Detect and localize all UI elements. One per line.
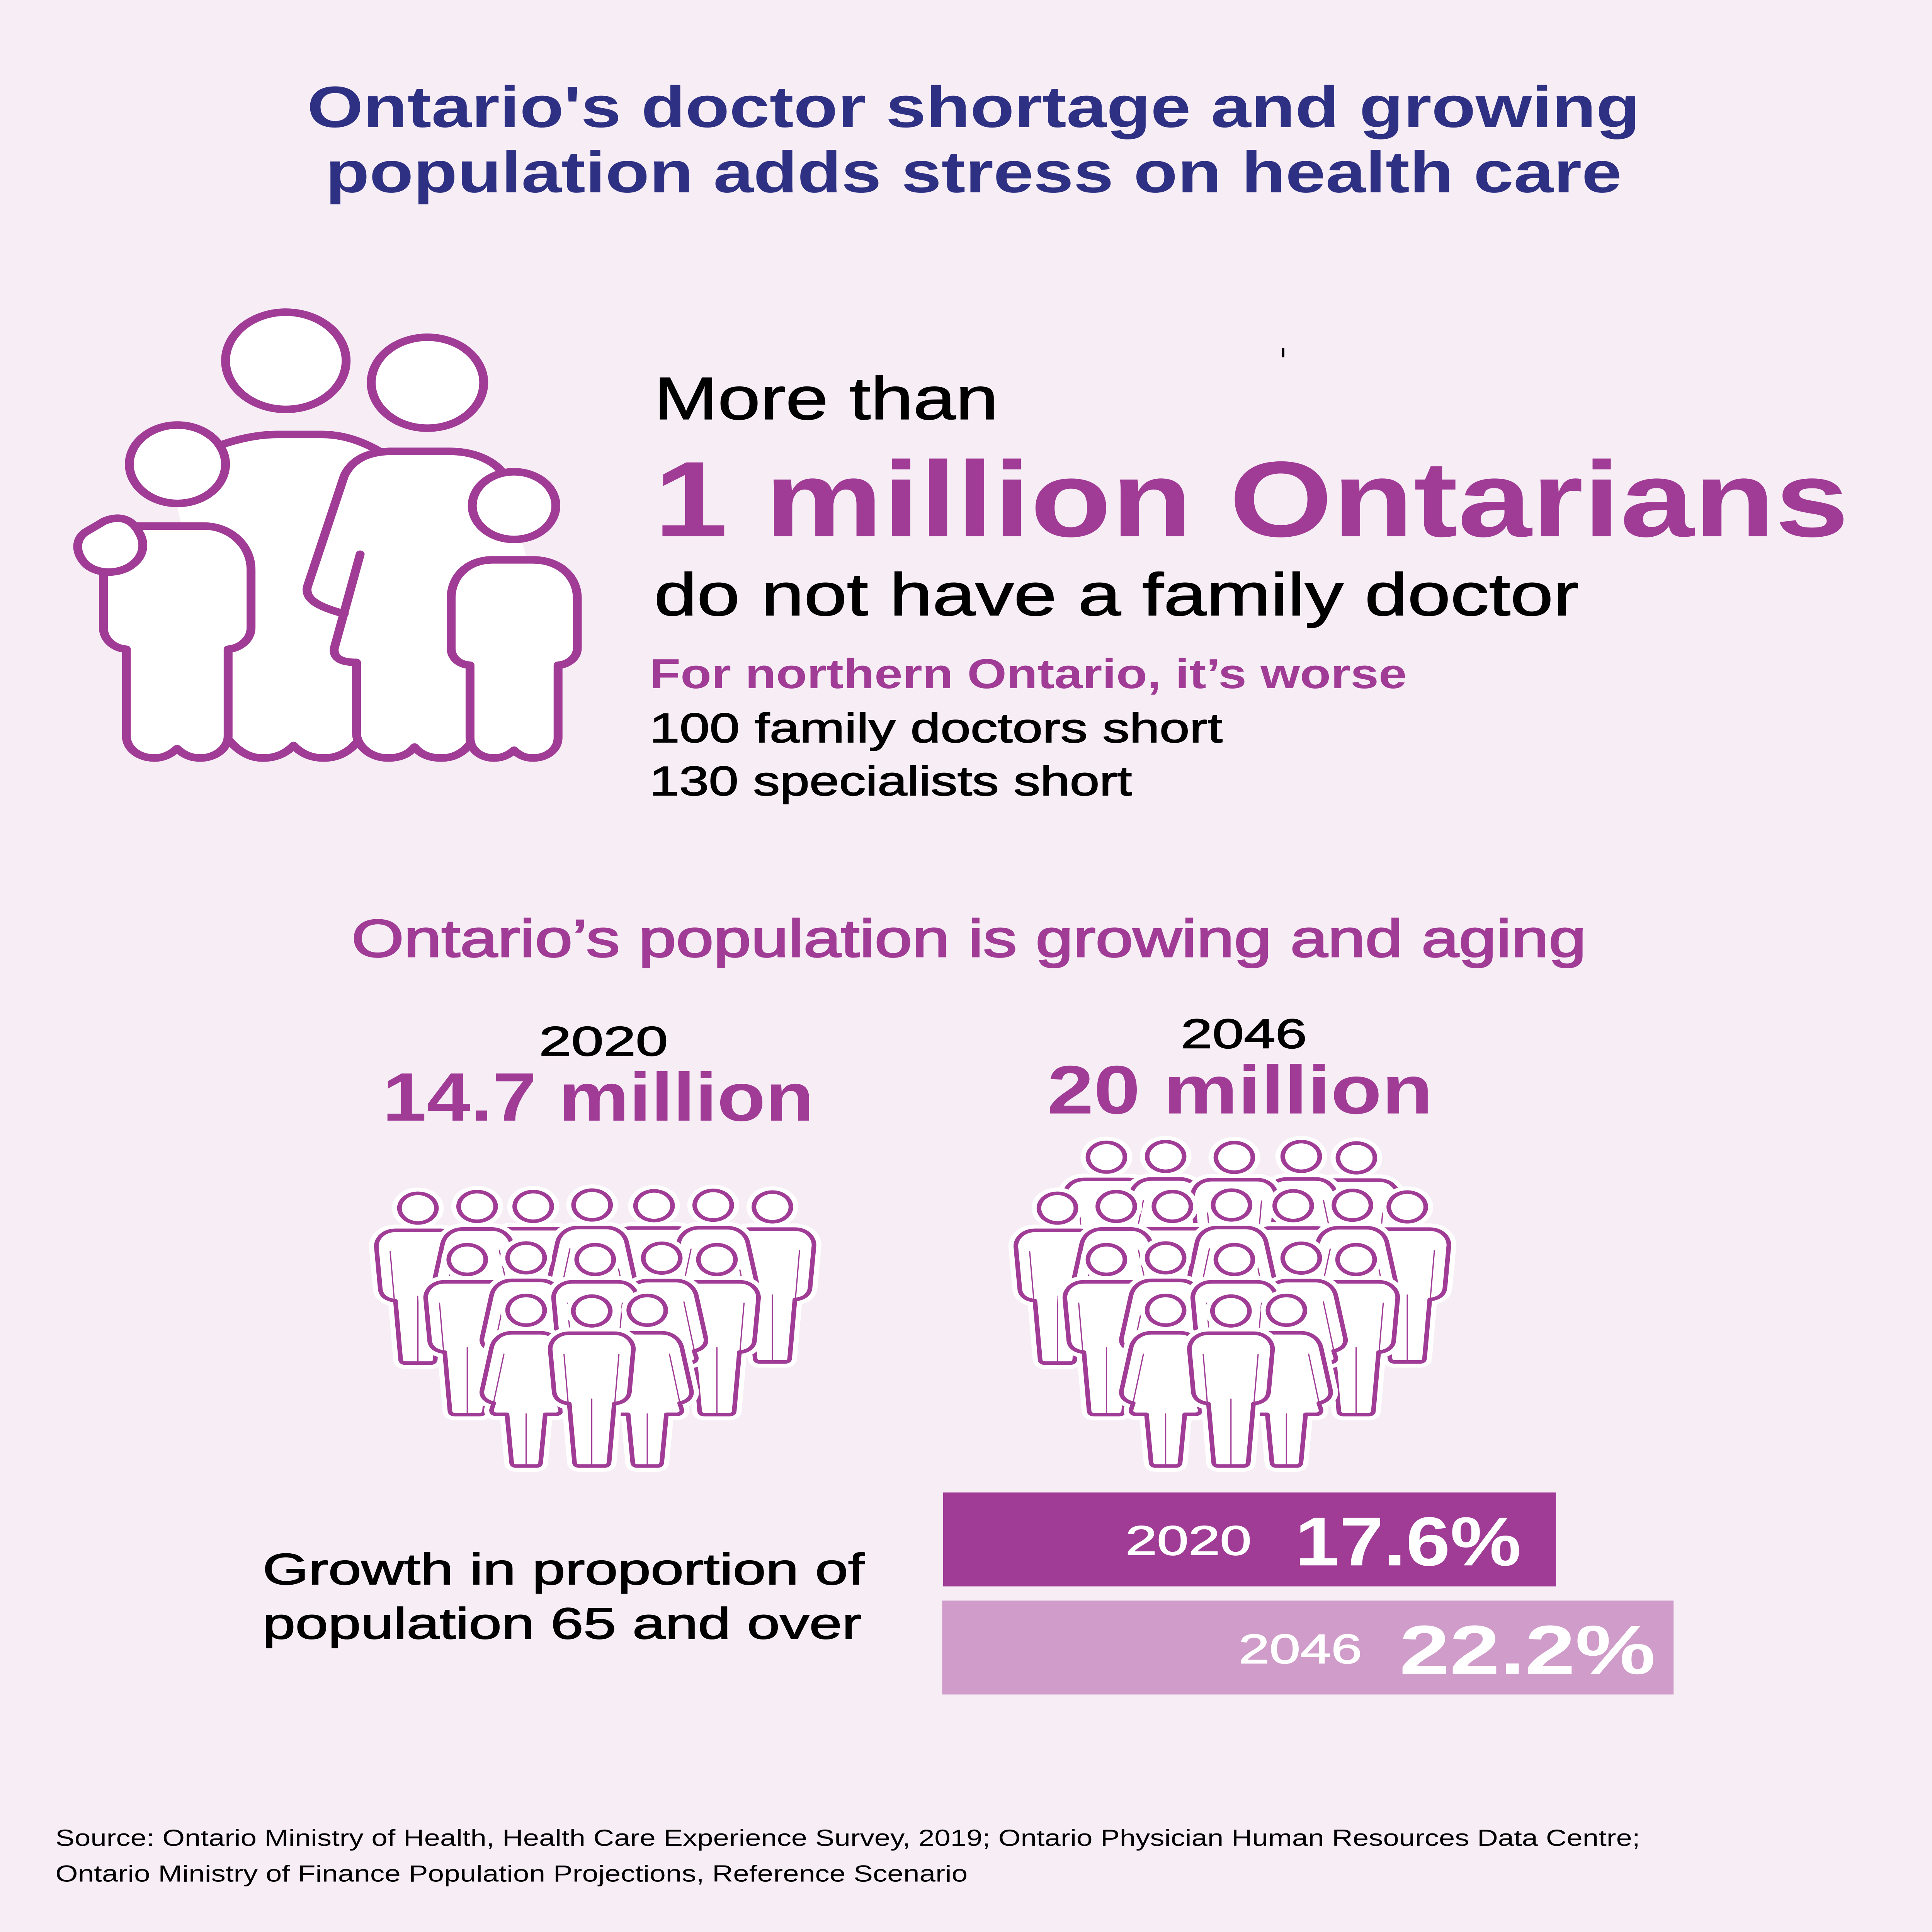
left child [104, 526, 251, 758]
text: northern Ontario heading: For northern Ontario, it’s worse [650, 650, 1407, 697]
father figure [177, 434, 378, 758]
text: no family doctor: do not have a family doctor [654, 561, 1579, 628]
top row [1065, 1141, 1398, 1313]
title: Ontario's doctor shortage and growing [307, 75, 1640, 139]
text: growth in proportion: Growth in proportion of [263, 1545, 865, 1594]
bar: 2020 share [943, 1492, 1556, 1587]
stray tick mark [1282, 348, 1284, 357]
stat: 14.7 million: 14.7 million [383, 1059, 814, 1135]
label: 2046: 2046 [1181, 1010, 1307, 1057]
bar: 2046 share: 22.2% [1400, 1611, 1656, 1689]
baby head [78, 518, 143, 572]
label: 2020: 2020 [539, 1018, 668, 1065]
icon: crowd 2046 [1016, 1141, 1449, 1466]
front row [482, 1296, 692, 1466]
text: 1 million Ontarians: 1 million Ontarians [654, 439, 1849, 559]
source note [55, 1825, 1640, 1887]
source note: Source: Ontario Ministry of Health, Health Care Experience Survey, 2019; Ontario Physician Human Resources Data Centre; [55, 1825, 1640, 1851]
bar: 2046 share [942, 1600, 1673, 1694]
back row [1016, 1190, 1449, 1363]
bar: 2046 share: 2046 [1238, 1626, 1362, 1672]
middle row [1065, 1243, 1398, 1415]
bar: 2020 share: 17.6% [1295, 1503, 1521, 1580]
front row [1121, 1296, 1331, 1466]
stat: 20 million: 20 million [1047, 1052, 1433, 1128]
mother figure [307, 451, 527, 758]
text: more than: More than [654, 365, 998, 432]
text: specialists short: 130 specialists short [650, 758, 1132, 804]
title: population adds stress on health care [325, 140, 1622, 205]
text: growth in proportion: population 65 and over [263, 1599, 862, 1648]
icon: crowd 2020 [376, 1190, 814, 1466]
section heading: population: Ontario’s population is growing and aging [352, 909, 1586, 968]
text: family doctors short: 100 family doctors short [650, 704, 1223, 751]
bar: 2020 share: 2020 [1126, 1517, 1252, 1564]
icon: family of four [78, 312, 577, 758]
middle row [426, 1243, 759, 1415]
text: growth in proportion [263, 1545, 865, 1648]
title [307, 75, 1640, 205]
right child [451, 560, 577, 758]
source note: Ontario Ministry of Finance Population Projections, Reference Scenario [55, 1861, 968, 1887]
back row [376, 1190, 814, 1363]
